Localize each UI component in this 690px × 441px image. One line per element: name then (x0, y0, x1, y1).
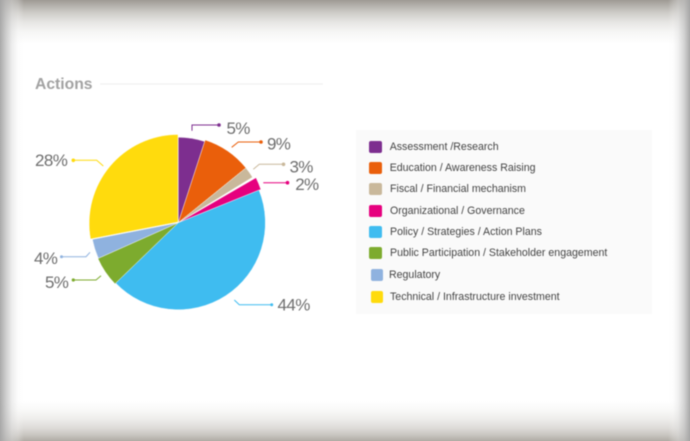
legend swatch: fiscal (369, 183, 382, 195)
legend label: technical: Technical / Infrastructure investment (390, 291, 560, 303)
legend label: fiscal: Fiscal / Financial mechanism (390, 183, 526, 195)
legend label: regulatory: Regulatory (389, 269, 440, 281)
callout: education 9% (232, 134, 291, 153)
callout: technical 28%: 28% (35, 151, 68, 170)
legend swatch: policy (369, 226, 382, 238)
panel: legend (356, 130, 652, 314)
callout: public participation 5%: 5% (45, 273, 69, 292)
callout: assessment 5% (192, 119, 250, 138)
pie chart (89, 134, 265, 310)
legend label: public participation: Public Participation / Stakeholder engagement (390, 247, 607, 259)
callout: regulatory 4%: 4% (34, 249, 58, 268)
callout: organizational 2%: 2% (295, 175, 319, 194)
legend swatch: technical (371, 291, 383, 303)
legend label: organizational: Organizational / Governance (390, 205, 525, 217)
callout: regulatory 4% (34, 249, 90, 268)
legend swatch: public participation (369, 247, 382, 259)
callout: policy 44% (234, 296, 310, 315)
callout: organizational 2% (263, 175, 319, 194)
legend swatch: education (369, 162, 382, 174)
callout: fiscal 3% (253, 157, 313, 176)
legend swatch: regulatory (371, 268, 383, 281)
callout: public participation 5% (45, 273, 101, 292)
title: Actions (35, 76, 93, 93)
legend swatch: organizational (369, 204, 382, 217)
legend label: assessment: Assessment /Research (390, 141, 499, 153)
callout: fiscal 3%: 3% (290, 157, 313, 176)
legend label: education: Education / Awareness Raising (390, 162, 536, 174)
callout: policy 44%: 44% (278, 296, 310, 315)
legend label: policy: Policy / Strategies / Action Plans (390, 226, 542, 238)
legend swatch: assessment (369, 140, 382, 153)
callout: technical 28% (35, 151, 103, 170)
callout: education 9%: 9% (267, 134, 291, 153)
callout: assessment 5%: 5% (226, 119, 250, 138)
